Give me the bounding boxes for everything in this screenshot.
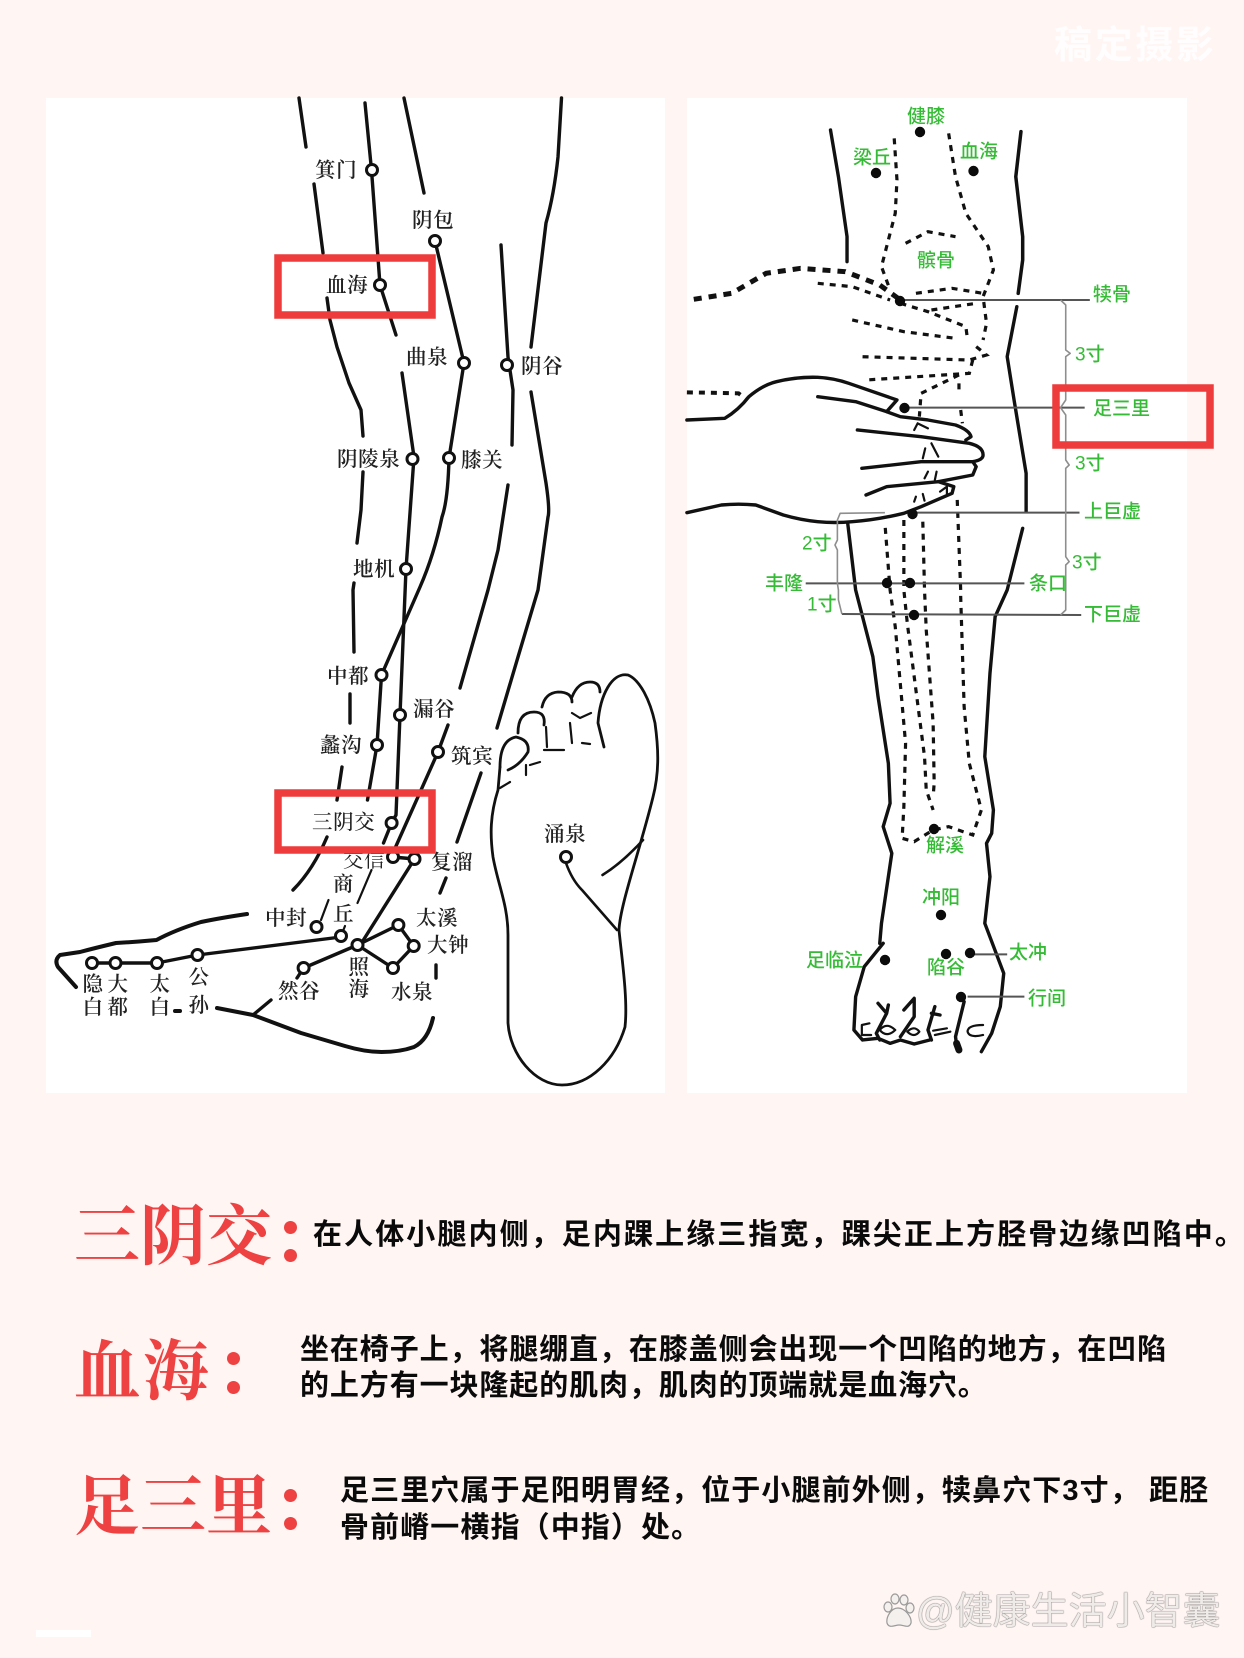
acupoint: 然谷: [278, 962, 320, 1003]
acupoint: 大钟: [408, 934, 469, 957]
distance label: 1寸: 1寸: [807, 594, 837, 616]
description: 足三里: 足三里穴属于足阳明胃经，位于小腿前外侧，犊鼻穴下3寸， 距胫: [340, 1475, 1209, 1507]
acupoint: 膝关: 膝关: [461, 449, 503, 472]
acupoint: 太溪: 太溪: [416, 907, 458, 930]
red highlight box: 三阴交: [278, 793, 432, 850]
acupoint: 商丘: [333, 873, 354, 942]
point: 行间: 行间: [1028, 988, 1066, 1010]
distance label: 3寸 lower: 3寸: [1072, 552, 1102, 574]
acupoint: 蠡沟: [320, 734, 382, 757]
acupoint: 公孙: 孙: [188, 994, 210, 1017]
point: 梁丘: [853, 146, 891, 178]
acupoint: 曲泉: [406, 346, 470, 369]
leg outline strokes: [293, 98, 562, 978]
point: 冲阳: 冲阳: [922, 886, 960, 908]
heading: 血海: 血海: [74, 1336, 212, 1409]
section: 血海: [74, 1334, 1167, 1409]
section: 三阴交: [74, 1201, 1244, 1274]
red highlight box: 血海: [278, 258, 432, 315]
watermark text: @健康生活小智囊: [916, 1591, 1221, 1633]
foot side outline: [56, 914, 433, 1052]
acupoint: 漏谷: 漏谷: [413, 698, 455, 721]
acupoint: 大都: 大: [107, 973, 129, 996]
point: 上巨虚: [907, 500, 1141, 522]
panel: front leg acupoints: [687, 98, 1210, 1093]
acupoint: 中封: 中封: [265, 907, 307, 930]
acupoint: 中都: 中都: [327, 665, 369, 688]
acupoint: 阴包: [412, 209, 454, 246]
heading: 三阴交: 三阴交: [74, 1201, 272, 1274]
heading colon: [227, 1352, 240, 1394]
acupoint: 隐白: 白: [82, 996, 104, 1019]
point: 太冲: [965, 942, 1047, 964]
acupoint: 曲泉: 曲泉: [406, 346, 448, 369]
point: 条口: [905, 572, 1067, 594]
description: 足三里: [340, 1474, 1209, 1544]
point: 太冲: 太冲: [1009, 942, 1047, 964]
acupoint: 大钟: 大钟: [427, 934, 469, 957]
point: 足三里: [899, 398, 1150, 420]
point: 足临泣: 足临泣: [806, 950, 863, 972]
point: 下巨虚: [909, 604, 1141, 626]
point: 条口: 条口: [1029, 572, 1067, 594]
point: 陷谷: 陷谷: [927, 956, 965, 978]
distance label: 3寸 upper: 3寸: [1075, 344, 1105, 366]
point: 犊骨: [895, 284, 1131, 306]
section: 足三里: [74, 1471, 1209, 1544]
point: 丰隆: [765, 572, 892, 594]
description: 血海: [300, 1334, 1167, 1402]
point: 上巨虚: 上巨虚: [1084, 500, 1141, 522]
acupoint: 照海: [348, 940, 370, 1001]
point: 犊骨: 犊骨: [1093, 284, 1131, 306]
acupoint: 复溜: [409, 851, 473, 874]
acupoint: 中封: [265, 907, 322, 932]
acupoint: 太白: 白: [149, 996, 171, 1019]
acupoint: 然谷: 然谷: [278, 980, 320, 1003]
acupoint: 涌泉: [544, 823, 586, 862]
point: 丰隆: 丰隆: [765, 572, 803, 594]
acupoint: 水泉: 水泉: [391, 981, 433, 1004]
point: 足临泣: [806, 950, 890, 972]
acupoint: 漏谷: [394, 698, 455, 721]
acupoint: 太白: 太: [149, 973, 171, 996]
acupoint: 阴陵泉: 阴陵泉: [337, 448, 400, 471]
acupoint: 血海: [326, 274, 386, 297]
acupoint: 商丘: 丘: [333, 903, 354, 926]
description: 血海: 的上方有一块隆起的肌肉，肌肉的顶端就是血海穴。: [300, 1370, 988, 1402]
point: 解溪: 解溪: [926, 834, 964, 856]
point: 冲阳: [922, 886, 960, 920]
description: 血海: 坐在椅子上，将腿绷直，在膝盖侧会出现一个凹陷的地方，在凹陷: [300, 1334, 1167, 1366]
acupoint: 大都: 都: [107, 996, 129, 1019]
acupoint: 血海: 血海: [326, 274, 368, 297]
acupoint: 太溪: [393, 907, 458, 930]
small white bar: [36, 1630, 91, 1637]
heading: 足三里: 足三里: [74, 1471, 272, 1544]
leg, hand and foot drawing: [687, 130, 1026, 1052]
meridian lines: [92, 103, 464, 978]
point: 足三里: 足三里: [1093, 398, 1150, 420]
bottom watermark: [883, 1590, 1221, 1633]
acupoint: 蠡沟: 蠡沟: [320, 734, 362, 757]
acupoint: 涌泉: 涌泉: [544, 823, 586, 846]
acupoint: 膝关: [444, 449, 503, 472]
heading colon: [284, 1221, 297, 1262]
acupoint: 隐白: 隐: [82, 973, 104, 996]
label: 髌骨: 髌骨: [917, 250, 955, 272]
distance label: 3寸 middle: 3寸: [1075, 452, 1105, 474]
acupoint: 复溜: 复溜: [431, 851, 473, 874]
acupoint: 箕门: 箕门: [315, 159, 357, 182]
acupoint: 中都: [327, 665, 387, 688]
acupoint: 阴谷: 阴谷: [521, 355, 563, 378]
acupoint: 阴包: 阴包: [412, 209, 454, 232]
acupoint: 筑宾: [432, 744, 493, 768]
acupoint: 地机: 地机: [353, 558, 395, 581]
point: 血海: 血海: [960, 140, 998, 162]
acupoint: 三阴交: 三阴交: [312, 811, 375, 834]
acupoint: 筑宾: 筑宾: [451, 744, 493, 768]
foot sole outline: [491, 675, 658, 1085]
dashed bone and muscle lines: [687, 133, 993, 842]
panel: inner leg and foot acupoints: [46, 98, 665, 1093]
acupoint: 交信: 交信: [343, 849, 385, 872]
acupoint: 阴谷: [502, 355, 563, 378]
acupoint: 隐白: [82, 958, 104, 1019]
acupoint: 公孙: [188, 950, 210, 1017]
description: 三阴交: 在人体小腿内侧，足内踝上缘三指宽，踝尖正上方胫骨边缘凹陷中。: [313, 1219, 1244, 1251]
top-right watermark: 稿定摄影: [1054, 25, 1216, 67]
point: 血海: [960, 140, 998, 176]
acupoint: 地机: [353, 558, 412, 581]
gray leader lines and brackets: [806, 300, 1090, 997]
point: 健膝: [907, 106, 945, 137]
acupoint: 照海: 海: [348, 978, 370, 1001]
point: 下巨虚: 下巨虚: [1084, 604, 1141, 626]
acupoint: 商丘: 商: [333, 873, 354, 896]
point: 健膝: 健膝: [907, 106, 945, 128]
acupoint: 公孙: 公: [188, 967, 210, 989]
acupoint: 太白: [149, 958, 171, 1019]
heading colon: [284, 1489, 297, 1530]
acupoint: 照海: 照: [348, 956, 370, 979]
acupoint: 箕门: [315, 159, 378, 182]
acupoint: 大都: [107, 958, 129, 1019]
point: 梁丘: 梁丘: [853, 146, 891, 168]
distance label: 2寸: 2寸: [802, 532, 832, 554]
point: 行间: [956, 988, 1066, 1010]
red highlight box: 足三里: [1056, 388, 1210, 445]
acupoint: 水泉: [388, 962, 433, 1004]
icon: paw: [883, 1593, 915, 1627]
description: 足三里: 骨前嵴一横指（中指）处。: [340, 1512, 701, 1544]
point: 解溪: [926, 824, 964, 856]
